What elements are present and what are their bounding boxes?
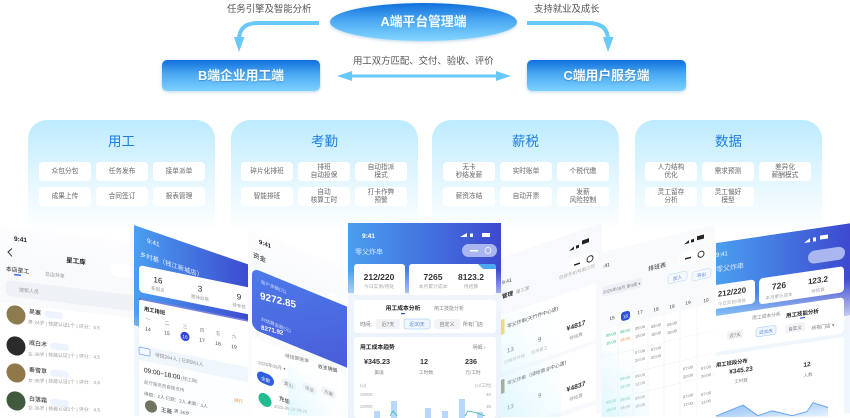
phone: skill analysis: 用工技能分析	[786, 307, 819, 320]
box: B side: B端企业用工端	[198, 68, 284, 83]
phone: funds: 全部	[261, 375, 270, 385]
schedule cells: 18:00	[635, 332, 646, 339]
lower cards: 一	[146, 317, 151, 323]
schedule cells: 08:00	[651, 322, 662, 329]
phone: cost analysis (centre): ¥345.23	[364, 357, 390, 366]
panel: attendance: 自动投保	[311, 172, 337, 178]
phone: cost analysis (centre): 元/工时	[465, 369, 481, 376]
phone: skill analysis: 待结算	[811, 286, 825, 295]
phone: per-store settlement	[501, 238, 595, 417]
phone: per-store settlement: 13	[507, 403, 514, 412]
phone: cost analysis (centre): 美境	[374, 369, 384, 376]
schedule cells: 18:00	[620, 335, 631, 343]
schedule cells: 08:00	[620, 327, 631, 335]
schedule cells: 16:00	[620, 403, 631, 411]
phone: cost analysis (centre): 零父炸串	[355, 247, 383, 256]
panel: payroll: 个税代缴	[570, 168, 596, 174]
phone: skill analysis: 近7天	[729, 331, 741, 340]
phone: funds: 项目	[305, 385, 314, 394]
phone: per-store settlement: ¥4837	[567, 381, 586, 394]
phone: shift schedule: 19	[703, 297, 709, 305]
schedule cells: 09:00	[606, 398, 617, 405]
lower cards: 9	[237, 292, 242, 302]
phone: cost analysis (centre): 所有门店	[463, 321, 483, 328]
phone: skill analysis: 自定义	[788, 324, 802, 333]
panel: payroll: 实时账单	[513, 168, 539, 174]
panel: attendance	[231, 120, 418, 232]
panel: employment	[28, 120, 215, 232]
panel: employment: 成果上传	[52, 192, 78, 200]
phone: shift schedule: 16	[623, 313, 628, 319]
phone: cost analysis (centre): 12	[420, 357, 428, 366]
phone: cost analysis (centre): 自定义	[439, 321, 455, 328]
label: employment support: 支持就业及成长	[534, 3, 600, 14]
phone: shift schedule: :41	[603, 262, 610, 270]
phone: shift schedule: 15	[609, 315, 615, 322]
phone: shift schedule: 17	[637, 309, 643, 316]
phone: per-store settlement: ¥4817	[567, 320, 586, 333]
schedule cells: 18:00	[667, 328, 678, 335]
phone: skill analysis: 所有门店 ▾	[812, 321, 835, 332]
schedule cells: 18:00	[651, 330, 662, 337]
panel: payroll: 发薪	[576, 188, 590, 196]
phone: per-store settlement: 星工家	[516, 284, 530, 295]
phone: cost analysis (centre): 待结算	[464, 283, 478, 290]
phone: funds: 9272.85	[260, 291, 296, 311]
phone: per-store settlement: 零父炸串(天竹乔中心店)	[507, 305, 558, 330]
worker rows: 男·24岁 | 技能认证1个 | 评分：4.5	[28, 318, 100, 332]
area chart	[716, 403, 828, 417]
box: C side: C端用户服务端	[563, 68, 650, 83]
phone: cost analysis (centre): 近30天	[409, 321, 425, 328]
lower cards: 三	[183, 324, 188, 331]
phone: cost analysis (centre)	[348, 223, 501, 418]
worker rows	[6, 304, 100, 418]
schedule cells: 11:00	[701, 398, 712, 405]
panel: attendance: 排班	[317, 164, 331, 170]
panel: employment: 任务发布	[109, 168, 135, 174]
phone: cost analysis (centre): 212/220	[364, 272, 395, 282]
panel: data: 模型	[721, 196, 735, 204]
phone: per-store settlement: 管理	[502, 289, 513, 301]
lower cards: 六	[232, 333, 237, 341]
phone: per-store settlement: 待结算	[569, 330, 583, 342]
phone: funds: 2025年09月 ▾	[258, 359, 286, 373]
lower cards: 用工排班	[144, 305, 166, 317]
phone: worker library: 9:41	[14, 236, 27, 244]
lower cards: 14	[145, 326, 151, 333]
lower cards: 四	[200, 327, 205, 334]
panel: attendance: 碎片化排班	[250, 168, 284, 174]
schedule cells: 08:00	[606, 331, 617, 338]
lower cards: 前厅服务员自摇支持	[144, 379, 185, 394]
phone: cost analysis (centre): 用工成本分析	[386, 304, 421, 312]
phone: cost analysis (centre): 35	[486, 404, 492, 409]
phone: skill analysis: 近30天	[759, 327, 773, 336]
phone: cost analysis (centre): 明细 ›	[472, 344, 486, 351]
phone: skill analysis: 工时数	[734, 376, 748, 385]
phone: store dashboard	[134, 225, 248, 416]
panel: employment: 接单派单	[166, 168, 192, 174]
panel: employment: 报表管理	[166, 192, 192, 200]
worker rows: 白落霜	[29, 395, 47, 405]
panel: payroll: 薪资冻结	[456, 192, 482, 200]
schedule cells: 12:00	[620, 382, 631, 390]
lower cards: 18	[215, 341, 221, 348]
phone: cost analysis (centre): 20000	[360, 404, 373, 409]
phone: funds: 共结算金额(元)	[261, 316, 291, 335]
phone mockups	[6, 223, 850, 418]
phone: per-store settlement: 仅获手机号用工的	[559, 262, 595, 282]
worker rows: 女·36岁 | 技能认证1个 | 评分：4.5	[28, 377, 100, 386]
worker rows: 女·36岁 | 技能认证1个 | 评分：4.5	[28, 350, 100, 361]
schedule cells: 08:00	[635, 324, 646, 331]
phone: funds: 支出	[284, 379, 293, 390]
schedule cells: 09:00	[635, 372, 646, 379]
worker rows: 秦雪草	[29, 366, 47, 376]
schedule cells: 07:00	[701, 390, 712, 397]
phone: cost analysis (centre): 本月累计成本	[419, 283, 448, 290]
panel: data: 差异化	[775, 164, 795, 170]
panel: data: 人力结构	[658, 164, 684, 170]
panel: attendance: 打卡作弊	[368, 188, 394, 196]
schedule cells: 11:00	[683, 400, 694, 408]
box: B side	[162, 60, 320, 91]
worker rows: 吴塞	[29, 308, 41, 317]
panel: data	[635, 120, 822, 232]
panel: attendance: 模式	[374, 172, 388, 178]
lower cards: 待考核	[232, 301, 246, 311]
lower cards: 16	[154, 275, 163, 286]
panel: data: 优化	[664, 172, 678, 178]
phone: funds: 收支明细	[318, 363, 337, 374]
panel: payroll	[432, 120, 619, 232]
panel: payroll: 薪税	[512, 134, 539, 149]
lower cards: 16	[182, 334, 188, 341]
panel: data: 灵工偏好	[715, 188, 741, 196]
phone: cost analysis (centre): (U/工时)	[475, 382, 492, 388]
schedule cells: 09:00	[620, 395, 631, 403]
phone: skill analysis	[711, 223, 850, 418]
phone: per-store settlement: 13	[507, 346, 514, 355]
panel: data: 分析	[664, 196, 678, 204]
platform ellipse: A端平台管理端	[380, 14, 467, 29]
lower cards: 二	[165, 320, 170, 327]
phone: shift schedule: 导出	[697, 270, 706, 280]
phone: shift schedule: 2025年09月 第3周 ▾	[603, 280, 641, 296]
schedule cells: 07:00	[683, 364, 694, 372]
schedule cells: 20:00	[651, 353, 662, 360]
phone: funds: 方案	[324, 388, 333, 398]
schedule cells: 12:00	[635, 380, 646, 387]
phone: funds: 账户余额(元)	[261, 279, 287, 296]
phone: skill analysis: 人数	[804, 371, 813, 379]
phone: cost analysis (centre): (U)	[360, 383, 367, 388]
lower cards: (钱江网)	[181, 375, 198, 385]
schedule cells: 09:00	[620, 374, 631, 382]
schedule cells: 16:00	[635, 402, 646, 409]
phone: funds: 9:41	[259, 239, 271, 251]
phone: cost analysis (centre): 9:41	[362, 233, 375, 240]
phone: cost analysis (centre): 用工技能分析	[434, 305, 464, 312]
phone: worker library: 搜索人员	[19, 286, 39, 296]
phone: cost analysis (centre): 今日实到/待处	[364, 283, 394, 290]
phone: per-store settlement: 9	[538, 336, 542, 344]
phone: cost analysis (centre): 236	[465, 357, 477, 366]
panel: payroll: 无卡	[462, 164, 476, 170]
label: two-way matching: 用工双方匹配、交付、验收、评价	[353, 55, 494, 66]
phone: funds	[252, 240, 347, 416]
lower cards: 待招：2人 已到：2人 未到：1人	[144, 390, 208, 410]
phone: skill analysis: 9:41	[716, 251, 728, 259]
worker rows: 戚白术	[29, 339, 47, 349]
phone: per-store settlement: 在用星工	[531, 344, 548, 356]
lower cards: 15	[164, 330, 170, 337]
phone: shift schedule: 18	[653, 306, 659, 314]
phone: funds: 8271.92	[261, 324, 284, 337]
lower cards: 3	[198, 284, 203, 294]
phone: skill analysis: 用工成本分析	[752, 310, 781, 322]
panel: employment: 合同签订	[109, 192, 135, 200]
panel: payroll: 秒结发薪	[456, 172, 482, 178]
phone: skill analysis: 12	[803, 361, 811, 369]
phone: skill analysis: 123.2	[808, 274, 829, 286]
schedule cells: 08:00	[667, 320, 678, 327]
phone: shift schedule: 18	[669, 304, 675, 311]
lower cards	[138, 266, 248, 417]
panel: data: 灵工留存	[658, 188, 684, 196]
phone: worker library: 总店共享	[45, 271, 65, 280]
connector arrows	[234, 21, 614, 81]
phone: cost analysis (centre): 40	[486, 392, 492, 397]
phone: funds: 2025-09-22 09:26	[274, 404, 308, 414]
phone: worker library: 本店星工	[6, 265, 29, 276]
phone: store dashboard: 乡村基（钱江新城店）	[140, 249, 203, 280]
panel: attendance: 智能排班	[254, 192, 280, 200]
phone: worker library	[6, 236, 134, 412]
lower cards: 09:00~18:00	[144, 367, 181, 381]
phone: skill analysis: 本月累计成本	[766, 291, 793, 302]
panel: data: 数据	[715, 134, 742, 149]
schedule cells: 07:00	[651, 345, 662, 352]
phone: skill analysis: 用工班段分布	[716, 356, 748, 369]
schedule cells: 18:00	[606, 406, 617, 413]
label: task engine: 任务引擎及智能分析	[227, 3, 311, 14]
platform ellipse	[330, 3, 517, 41]
schedule cells: 20:00	[683, 372, 694, 380]
phone: worker library: 星工库	[66, 255, 86, 267]
panel: attendance: 预警	[374, 196, 388, 204]
panel: attendance: 考勤	[311, 134, 338, 149]
phone: skill analysis: 212/220	[718, 286, 747, 299]
phone: per-store settlement: 已审核待结	[504, 352, 526, 366]
phone: shift schedule: 排班表	[648, 261, 666, 273]
phone: funds: 资金	[253, 250, 266, 264]
phone: store dashboard: 9:41	[147, 238, 160, 249]
lower cards: 进行	[234, 396, 243, 405]
lower cards: 待招264人 | 已到261人	[155, 351, 204, 368]
lower cards: 新报名	[151, 285, 165, 294]
panel: payroll: 风险控制	[570, 196, 596, 204]
schedule cells: 20:00	[701, 372, 712, 379]
phone: cost analysis (centre): 近7天	[382, 321, 394, 328]
lower cards: 五	[216, 331, 221, 338]
lower cards: 17	[199, 337, 205, 344]
panel: employment: 众包分包	[52, 168, 78, 174]
box: C side	[527, 60, 686, 91]
phone: cost analysis (centre): 用工成本趋势	[360, 343, 395, 351]
phone: shift schedule: 19	[685, 300, 691, 307]
phone: funds: 充值	[279, 394, 290, 406]
phone: cost analysis (centre): 7265	[424, 272, 443, 282]
phone: cost analysis (centre): 时间:	[360, 321, 372, 328]
panel: employment: 用工	[108, 134, 135, 149]
schedule cells: 09:00	[635, 394, 646, 401]
phone: skill analysis: 726	[772, 280, 786, 292]
schedule cells: 20:00	[635, 356, 646, 363]
schedule cells: 07:00	[683, 392, 694, 400]
panel: payroll: 自动开票	[513, 192, 539, 200]
lower cards: 王薇	[161, 406, 172, 416]
panel: attendance: 核算工时	[311, 196, 337, 204]
worker rows: 女·36岁 | 技能认证1个 | 评分：4.5	[28, 404, 100, 414]
phone: funds: 待结算账单	[285, 352, 309, 365]
lower cards: 19	[231, 344, 237, 351]
phone: cost analysis (centre): 工时数	[419, 369, 433, 376]
phone: shift schedule	[602, 225, 715, 418]
phone: skill analysis: ¥345.23	[729, 366, 753, 376]
schedule cells: 18:00	[606, 339, 617, 346]
lower cards: 男·36岁	[174, 407, 189, 417]
phone: skill analysis: 今日实到/待处	[718, 297, 747, 308]
panel: data: 薪酬模式	[772, 172, 798, 178]
panel: attendance: 自动	[317, 188, 331, 196]
phone: per-store settlement: 待结算	[569, 391, 583, 403]
phone: per-store settlement: 零父炸串（绿地商业中心店）	[507, 358, 569, 387]
phone: cost analysis (centre): 8123.2	[458, 272, 484, 282]
panel: attendance: 自动指派	[368, 164, 394, 170]
bar chart	[374, 399, 483, 418]
phone: skill analysis: 零父炸串	[716, 261, 744, 274]
schedule cells: 07:00	[701, 364, 712, 371]
phone: cost analysis (centre): 25000	[360, 392, 373, 397]
phone: per-store settlement: 9:41	[502, 277, 512, 287]
phone: shift schedule: 加入	[673, 273, 682, 282]
panel: data: 需求预测	[715, 168, 741, 174]
schedule cells	[606, 321, 711, 412]
phone: per-store settlement: 9	[538, 392, 542, 400]
schedule cells: 07:00	[635, 348, 646, 355]
lower cards: 需排异常	[191, 293, 209, 303]
